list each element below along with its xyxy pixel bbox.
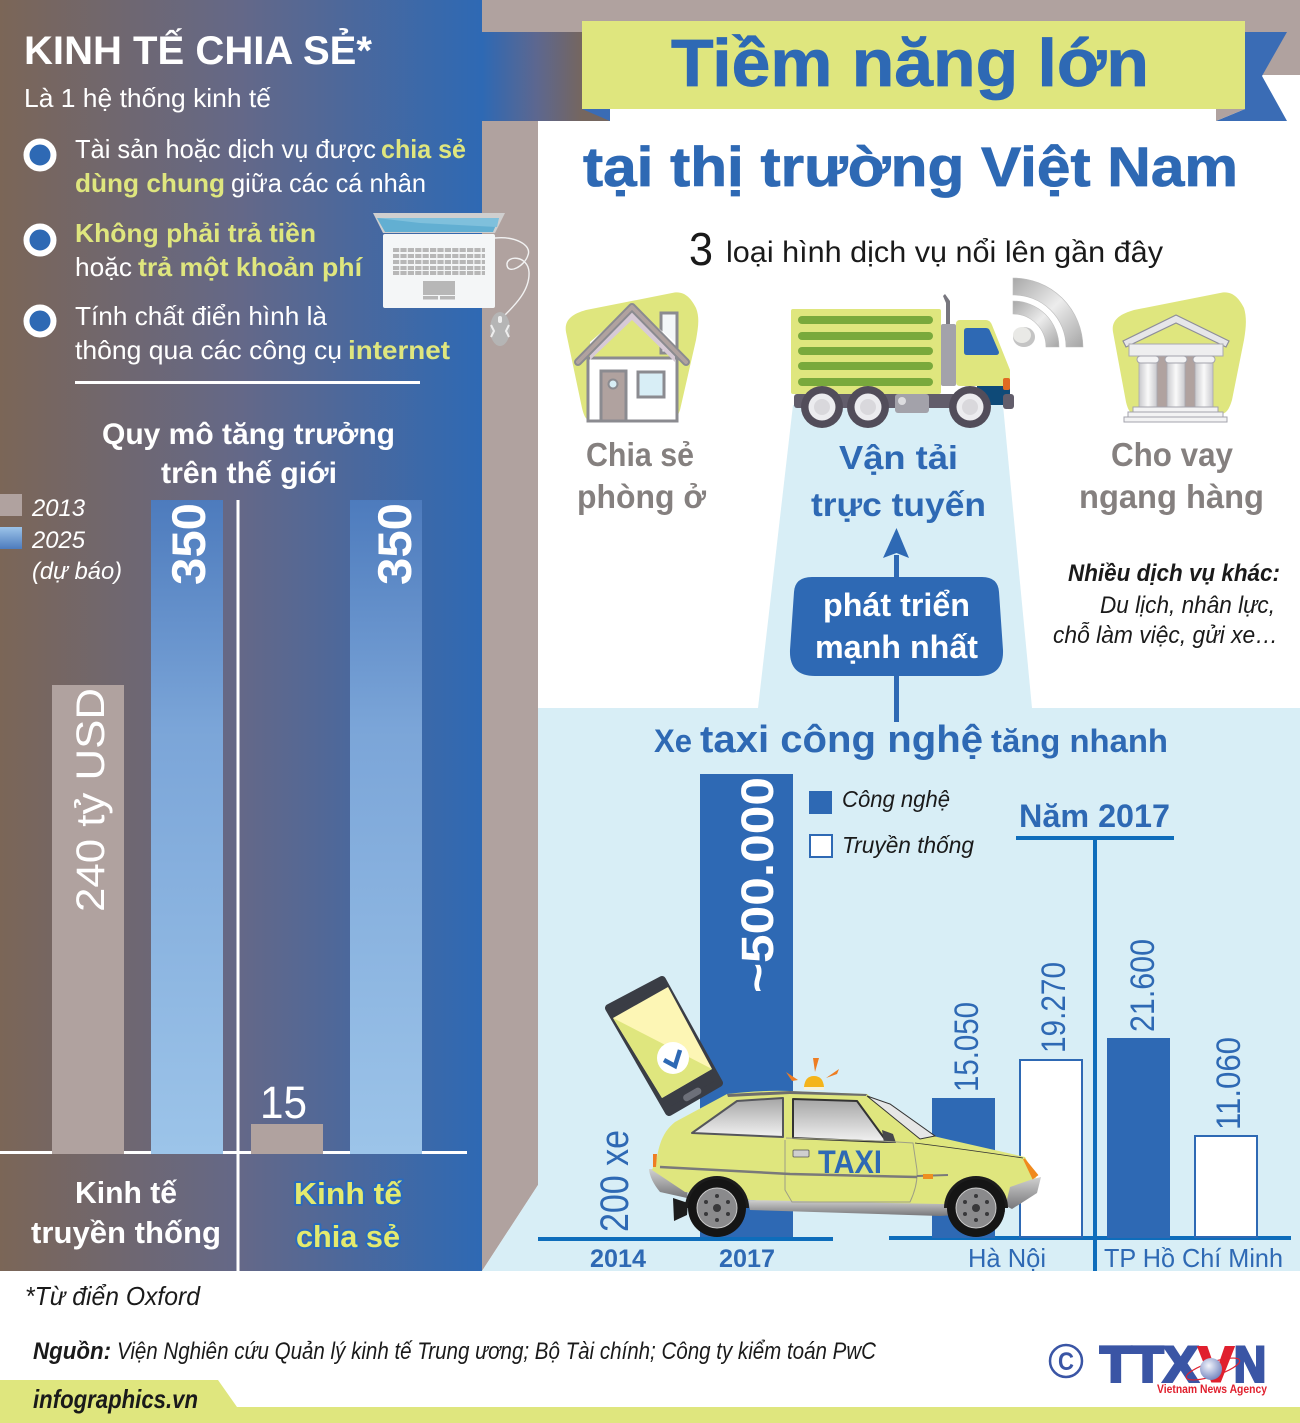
bar chart: year 2017 by city: Hà Nội	[968, 1243, 1046, 1273]
note: other services	[1053, 560, 1280, 649]
logo: TTXVN: V	[1198, 1336, 1235, 1392]
bullet 1: dùng chung	[75, 168, 225, 198]
footer band	[0, 1380, 1300, 1423]
light blue lower panel	[482, 708, 1300, 1271]
bar chart: taxi 2014-2017: 2014	[590, 1245, 646, 1273]
bar: traditional 2025	[151, 500, 223, 1154]
divider	[75, 381, 420, 384]
bar chart: taxi 2014-2017: 2017	[719, 1245, 775, 1273]
source: Viện Nghiên cứu Quản lý kinh tế Trung ương; Bộ Tài chính; Công ty kiểm toán PwC	[117, 1338, 877, 1365]
logo: copyright	[1050, 1345, 1082, 1377]
source: Nguồn:	[33, 1338, 111, 1365]
subtitle	[689, 223, 1163, 275]
bar: Ha Noi traditional	[1020, 962, 1082, 1237]
label: online transport: Vận tải	[839, 439, 958, 476]
axis label: traditional: Kinh tế	[75, 1175, 178, 1210]
taxi chart heading: tăng nhanh	[991, 723, 1168, 759]
chart legend	[0, 494, 122, 585]
taupe frame background	[482, 0, 1300, 1271]
callout: strongest growth	[790, 577, 1003, 676]
taxi chart heading	[654, 719, 1168, 761]
bar: Ha Noi technology	[932, 1002, 995, 1238]
label: peer lending: ngang hàng	[1079, 478, 1264, 515]
bar: HCMC traditional	[1195, 1037, 1257, 1237]
callout: strongest growth: mạnh nhất	[815, 629, 978, 665]
bar chart: year 2017 by city: TP Hồ Chí Minh	[1104, 1243, 1283, 1273]
callout: strongest growth: phát triển	[823, 587, 970, 623]
icon: truck with wifi	[791, 278, 1083, 428]
label: peer lending	[1079, 436, 1264, 515]
taxi legend: Công nghệ	[842, 786, 950, 812]
bar chart: taxi 2014-2017: ~500.000	[732, 777, 783, 993]
axis label: sharing	[294, 1176, 403, 1254]
taxi legend	[809, 786, 974, 858]
bar: traditional 2013	[52, 685, 124, 1154]
bullet 2	[26, 218, 363, 282]
bullet 1: Tài sản hoặc dịch vụ được	[75, 134, 376, 164]
label: online transport	[811, 439, 986, 523]
bar: sharing 2013: 15	[260, 1077, 307, 1128]
bar: sharing 2025	[350, 500, 422, 1154]
icon: smartphone	[609, 980, 719, 1112]
bullet 3	[26, 301, 450, 365]
subtitle: 3	[689, 223, 713, 275]
icon: house	[566, 292, 698, 421]
chart legend: 2025	[31, 527, 86, 554]
icon: bank	[1113, 292, 1246, 422]
bar chart: year 2017 by city	[889, 798, 1291, 1273]
icon: laptop and mouse	[373, 213, 529, 346]
axis label: traditional	[31, 1175, 221, 1250]
bullet 3: Tính chất điển hình là	[75, 301, 328, 331]
label: online transport: trực tuyến	[811, 486, 986, 523]
label: room sharing: phòng ở	[577, 478, 707, 515]
logo: TTXVN: Vietnam News Agency	[1157, 1382, 1267, 1396]
bar chart: year 2017 by city: Năm 2017	[1019, 798, 1170, 834]
logo: TTXVN: N	[1234, 1336, 1266, 1392]
bar: sharing 2013	[251, 1077, 323, 1154]
taxi legend: Truyền thống	[842, 832, 974, 858]
bar chart: taxi 2014-2017	[538, 774, 833, 1273]
footnote: *Từ điển Oxford	[25, 1281, 201, 1311]
bar: Ha Noi technology: 15.050	[948, 1002, 986, 1092]
label: room sharing	[577, 436, 707, 515]
bar: HCMC technology	[1107, 939, 1170, 1238]
icon: taxi	[649, 1058, 1041, 1237]
axis label: sharing: Kinh tế	[294, 1176, 403, 1211]
bar: HCMC technology: 21.600	[1124, 939, 1162, 1032]
note: other services: Nhiều dịch vụ khác:	[1068, 560, 1280, 587]
bar: traditional 2013: 240 tỷ USD	[69, 688, 113, 912]
taxi chart heading: taxi công nghệ	[700, 719, 983, 761]
logo: copyright: C	[1058, 1348, 1074, 1376]
label: room sharing: Chia sẻ	[586, 436, 694, 473]
axis label: traditional: truyền thống	[31, 1215, 221, 1250]
bullet 3: thông qua các công cụ	[75, 335, 342, 365]
bar: HCMC traditional: 11.060	[1210, 1037, 1248, 1130]
arrow: strongest growth	[883, 528, 909, 722]
axis label: sharing: chia sẻ	[296, 1219, 400, 1254]
left subheading: Là 1 hệ thống kinh tế	[24, 83, 272, 113]
note: other services: Du lịch, nhân lực,	[1100, 592, 1275, 619]
light blue spotlight behind truck	[758, 405, 1032, 708]
label: peer lending: Cho vay	[1111, 436, 1234, 473]
bar chart: global growth	[0, 500, 467, 1271]
bullet 1	[26, 134, 466, 198]
taxi chart heading: Xe	[654, 723, 692, 759]
logo: TTXVN: TTX	[1100, 1336, 1198, 1392]
icon: taxi: TAXI	[818, 1144, 882, 1180]
left heading: KINH TẾ CHIA SẺ*	[24, 27, 372, 73]
subtitle: loại hình dịch vụ nổi lên gần đây	[726, 236, 1163, 269]
title line 2: tại thị trường Việt Nam	[583, 135, 1238, 198]
chart legend: (dự báo)	[32, 558, 122, 585]
bar: sharing 2025: 350	[368, 503, 421, 585]
bar: traditional 2025: 350	[162, 503, 215, 585]
bullet 1: chia sẻ	[381, 134, 466, 164]
bullet 1: giữa các cá nhân	[231, 168, 426, 198]
bar: Ha Noi traditional: 19.270	[1035, 962, 1073, 1053]
left panel background	[0, 0, 482, 1271]
chart heading	[102, 418, 395, 490]
bullet 2: trả một khoản phí	[138, 252, 363, 282]
footer website: infographics.vn	[33, 1384, 198, 1414]
bullet 2: hoặc	[75, 252, 132, 282]
logo: TTXVN	[1100, 1336, 1267, 1396]
chart legend: 2013	[31, 495, 86, 522]
note: other services: chỗ làm việc, gửi xe…	[1053, 621, 1278, 649]
title ribbon	[482, 21, 1287, 121]
bullet 2: Không phải trả tiền	[75, 218, 316, 248]
bullet 3: internet	[348, 335, 450, 365]
chart heading: Quy mô tăng trưởng	[102, 418, 395, 451]
chart heading: trên thế giới	[161, 457, 337, 490]
bar chart: taxi 2014-2017: 200 xe	[593, 1130, 637, 1232]
title line 1: Tiềm năng lớn	[671, 26, 1149, 101]
